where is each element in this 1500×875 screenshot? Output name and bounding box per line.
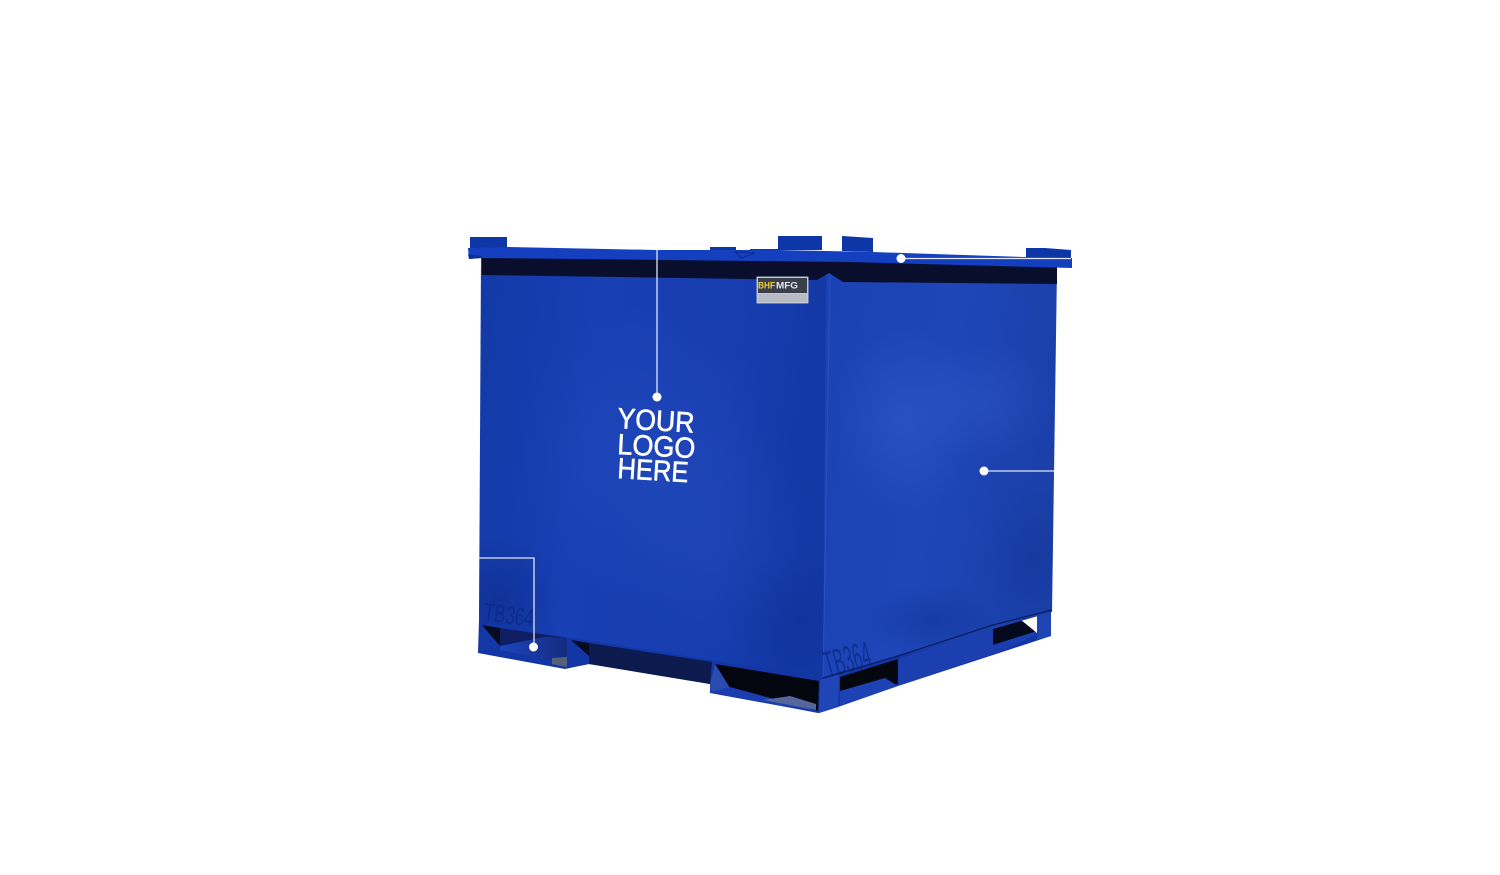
logo placeholder: HERE [617,453,689,489]
shadow band under lid [482,257,1057,284]
leader: side wall [980,466,1054,476]
leader: fork pocket [479,558,538,652]
maker plate: BHF [758,280,775,292]
skirt shadow line [823,610,1052,678]
pallet base [478,610,1051,713]
lid [468,236,1072,268]
pallet silhouette [478,610,1051,713]
maker plate: MFG [776,280,798,292]
container right face [822,273,1057,679]
corner post [819,674,839,713]
logo placeholder: YOUR [617,403,695,440]
front-right fork pocket [710,664,819,713]
maker plate [757,277,808,303]
logo placeholder: LOGO [617,429,696,465]
corner seam [823,275,830,678]
container front face [479,258,826,676]
leader: lid [896,254,1071,263]
container right face: TB364 [819,634,876,687]
logo placeholder [617,403,696,489]
illustration: blue steel container with leader lines [468,236,1072,713]
side fork pocket [840,659,898,705]
side skirt panel [898,627,993,686]
centre fork pocket [589,643,712,684]
lid tabs [470,236,1071,258]
left fork pocket [480,624,589,668]
rear side fork pocket [993,610,1051,655]
stamped mark, front: TB364 [482,598,536,633]
leader: logo [652,250,662,402]
